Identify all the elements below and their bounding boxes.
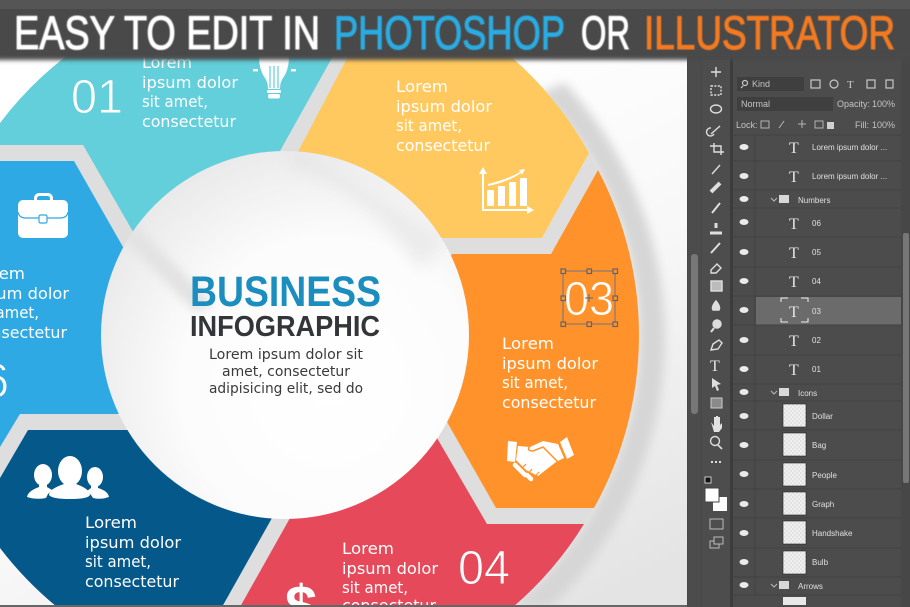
text layers: T	[789, 362, 799, 379]
center description	[209, 347, 364, 397]
icon: growth chart	[479, 167, 534, 214]
text layers: 06	[812, 219, 821, 228]
segment 02: yellow	[298, 40, 589, 238]
segment 05: navy	[0, 400, 272, 607]
text layers: 02	[812, 336, 821, 345]
icon: bulb	[253, 56, 296, 98]
text: orange segment: Lorem	[502, 335, 554, 353]
center description: amet, consectetur	[222, 364, 350, 380]
header text	[14, 6, 895, 59]
lock row: 100%	[872, 120, 895, 130]
text layers: T	[789, 304, 799, 321]
text layers: T	[789, 333, 799, 350]
header text: PHOTOSHOP	[334, 6, 565, 59]
layer groups	[771, 195, 830, 591]
blend mode row: 100%	[872, 99, 895, 109]
filter row	[737, 77, 893, 91]
text layers: 05	[812, 248, 821, 257]
number 03 with selection box: 03	[564, 273, 614, 326]
text layers: 04	[812, 277, 821, 286]
text layers: T	[789, 169, 799, 186]
text: yellow segment: Lorem	[396, 78, 448, 96]
center title: BUSINESS: BUSINESS	[190, 268, 381, 316]
text: blue segment	[0, 265, 70, 342]
text: teal segment: Lorem	[142, 54, 192, 72]
text layers: T	[789, 274, 799, 291]
blend mode row: Opacity:	[837, 99, 870, 109]
text: orange segment	[502, 335, 599, 412]
segment 06: blue	[0, 161, 200, 447]
text: red segment: Lorem	[342, 540, 394, 558]
text: navy segment: Lorem	[85, 514, 137, 532]
icon layers: Graph	[812, 500, 834, 509]
lock row	[736, 120, 895, 130]
gray gaps between segments	[0, 40, 598, 607]
selected layer highlight	[756, 297, 901, 325]
text: yellow segment	[396, 78, 493, 155]
header text: EASY TO EDIT IN	[14, 6, 320, 59]
blend mode row: Normal	[741, 99, 770, 109]
diagram: circular business infographic	[0, 0, 652, 607]
tool bar	[702, 50, 733, 607]
icon: briefcase	[18, 193, 68, 238]
center title: INFOGRAPHIC: INFOGRAPHIC	[190, 311, 380, 343]
text: yellow segment: consectetur	[396, 137, 491, 155]
text layers: 01	[812, 365, 821, 374]
text: orange segment: ipsum dolor	[502, 355, 599, 373]
text: yellow segment: ipsum dolor	[396, 98, 493, 116]
icon layers: People	[812, 471, 837, 480]
text layers: Lorem ipsum dolor ...	[812, 172, 887, 181]
tool bar: T	[710, 358, 720, 375]
filter row: Kind	[752, 79, 770, 89]
text: yellow segment: sit amet,	[396, 117, 462, 135]
layers panel	[733, 50, 901, 607]
text layers: T	[789, 245, 799, 262]
photoshop side panel	[687, 50, 910, 607]
icon layers	[783, 404, 853, 605]
outer soft shadow	[522, 81, 668, 605]
text: orange segment: consectetur	[502, 394, 597, 412]
layer groups: Icons	[798, 389, 817, 398]
icon layers: Dollar	[812, 412, 833, 421]
text layers: Lorem ipsum dolor ...	[812, 143, 887, 152]
center description: adipisicing elit, sed do	[209, 381, 363, 397]
center description: Lorem ipsum dolor sit	[209, 347, 364, 363]
number 01: 01	[71, 71, 123, 124]
lock row: Fill:	[855, 120, 869, 130]
icon layers: Bulb	[812, 558, 829, 567]
icon: handshake	[507, 437, 574, 479]
icon: people	[27, 456, 109, 499]
text: orange segment: sit amet,	[502, 374, 568, 392]
text layers: T	[789, 216, 799, 233]
header text: OR	[581, 6, 630, 59]
text: navy segment: ipsum dolor	[85, 534, 182, 552]
panel scrollbar	[903, 233, 909, 483]
text: teal segment	[142, 54, 239, 131]
blend mode row	[737, 97, 895, 111]
eye icons	[740, 144, 748, 588]
layer groups: Arrows	[798, 582, 823, 591]
canvas bottom edge	[0, 605, 690, 607]
icon layers: Handshake	[812, 529, 853, 538]
segment 01: teal	[0, 40, 342, 300]
text: teal segment: sit amet,	[142, 93, 208, 111]
segment 04: red	[240, 400, 584, 607]
number 04: 04	[458, 542, 510, 595]
segment 03: orange	[400, 170, 639, 508]
lock row: Lock:	[736, 120, 758, 130]
layer groups: Numbers	[798, 196, 830, 205]
text: teal segment: consectetur	[142, 113, 237, 131]
text layers	[781, 140, 887, 379]
text: teal segment: ipsum dolor	[142, 74, 239, 92]
header band	[0, 0, 910, 60]
text: navy segment: consectetur	[85, 573, 180, 591]
icon layers: Bag	[812, 441, 826, 450]
canvas background	[0, 50, 690, 607]
text: red segment: sit amet,	[342, 579, 408, 597]
text layers: 03	[812, 307, 821, 316]
text layers: T	[789, 140, 799, 157]
text: red segment	[342, 540, 439, 607]
filter row: T	[847, 79, 854, 91]
center circle	[101, 150, 469, 519]
text: navy segment	[85, 514, 182, 591]
text: navy segment: sit amet,	[85, 553, 151, 571]
text: red segment: ipsum dolor	[342, 560, 439, 578]
canvas scrollbar	[688, 50, 701, 607]
